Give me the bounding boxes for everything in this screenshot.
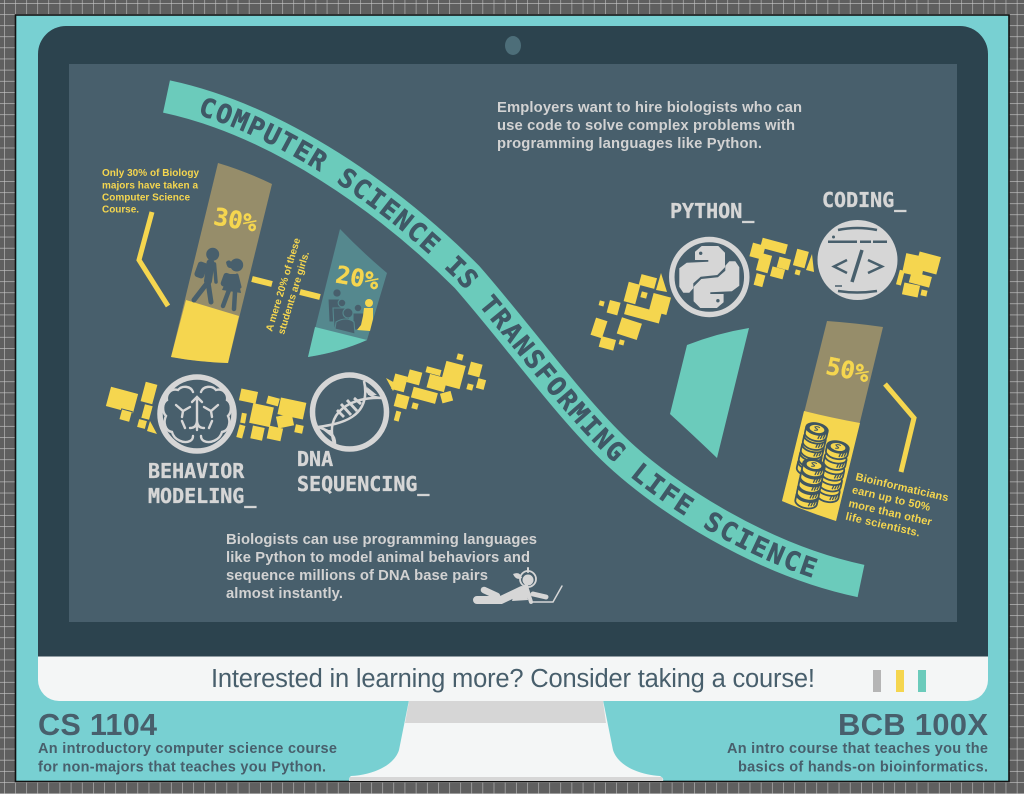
text: biologists: almost instantly. bbox=[226, 586, 343, 602]
course: CS 1104 bbox=[38, 708, 337, 776]
text: biologists bbox=[226, 532, 537, 602]
course: CS 1104: An introductory computer science course bbox=[38, 741, 337, 757]
text: biologists: sequence millions of DNA base pairs bbox=[226, 568, 488, 584]
label 20%: 20% bbox=[334, 261, 382, 296]
callout line right bbox=[885, 384, 914, 472]
label: DNA sequencing bbox=[297, 447, 430, 496]
course: CS 1104: for non-majors that teaches you Python. bbox=[38, 760, 326, 776]
monitor stand bbox=[349, 700, 663, 781]
course: BCB 100X: BCB 100X bbox=[838, 707, 988, 742]
tiles behind brain icon bbox=[106, 382, 306, 441]
tiles right of DNA icon bbox=[386, 353, 486, 422]
callout: 30 percent of biology majors: Only 30% of Biology bbox=[102, 168, 199, 179]
callout line left bbox=[139, 212, 168, 306]
callout: bioinformaticians: Bioinformaticians bbox=[854, 471, 950, 504]
callout: bioinformaticians: life scientists. bbox=[844, 511, 921, 540]
icon: group with girl bbox=[328, 289, 373, 334]
text: biologists: Biologists can use programming languages bbox=[226, 532, 537, 548]
shape: 20 percent bbox=[308, 229, 387, 357]
text: coding label: CODING_ bbox=[822, 188, 907, 212]
footer call to action: Interested in learning more? Consider taking a course! bbox=[211, 665, 815, 693]
icon: students bbox=[194, 248, 243, 309]
callout: bioinformaticians: more than other bbox=[847, 498, 934, 529]
course: BCB 100X: An intro course that teaches you the bbox=[727, 741, 988, 757]
text: biologists: like Python to model animal behaviors and bbox=[226, 550, 530, 566]
icon: coin stacks bbox=[794, 421, 850, 510]
course: CS 1104: CS 1104 bbox=[38, 708, 157, 742]
course: BCB 100X bbox=[727, 707, 988, 776]
callout: 30 percent of biology majors: Course. bbox=[102, 204, 139, 216]
ribbon title: COMPUTER SCIENCE IS TRANSFORMING LIFE SCIENCE bbox=[201, 98, 818, 578]
monitor bezel bbox=[38, 26, 988, 657]
label: DNA sequencing: DNA bbox=[297, 447, 333, 471]
icon: python bbox=[672, 240, 747, 314]
callout: 30 percent of biology majors: Computer Science bbox=[102, 192, 190, 204]
label: behavior modeling bbox=[148, 459, 257, 508]
callout: bioinformaticians: earn up to 50% bbox=[851, 484, 932, 514]
shape: teal panel bbox=[670, 328, 749, 458]
icon: DNA bbox=[312, 375, 386, 449]
monitor chin bbox=[38, 656, 988, 701]
camera bbox=[505, 36, 521, 55]
icon: coding bbox=[818, 220, 898, 300]
callout: 30 percent of biology majors: majors have taken a bbox=[102, 180, 198, 192]
colour bars bbox=[873, 670, 926, 692]
callout: girls: A mere 20% of these bbox=[264, 236, 303, 333]
bar: 50 percent bbox=[782, 321, 883, 521]
label 30%: 30% bbox=[212, 203, 260, 238]
text: employers: Employers want to hire biologists who can bbox=[497, 100, 802, 116]
course: BCB 100X: basics of hands-on bioinformatics. bbox=[738, 760, 988, 776]
label: behavior modeling: MODELING_ bbox=[148, 484, 257, 508]
label 50%: 50% bbox=[824, 352, 872, 388]
tiles right of coding icon bbox=[896, 251, 941, 298]
text: employers bbox=[497, 100, 802, 152]
icon: brain bbox=[160, 377, 234, 451]
tiles left of python icon bbox=[591, 273, 671, 351]
dashes connecting bars bbox=[252, 279, 320, 297]
python snake top bbox=[679, 246, 739, 308]
callout: bioinformaticians bbox=[844, 471, 950, 540]
label: behavior modeling: BEHAVIOR bbox=[148, 459, 245, 483]
callout: girls: students are girls. bbox=[276, 250, 312, 336]
text: python label: PYTHON_ bbox=[670, 199, 755, 223]
callout: 30 percent of biology majors bbox=[102, 168, 199, 216]
label: DNA sequencing: SEQUENCING_ bbox=[297, 472, 430, 496]
tiles between python and coding bbox=[749, 238, 814, 287]
text: employers: programming languages like Python. bbox=[497, 136, 762, 152]
icon: person with laptop bbox=[477, 568, 562, 602]
bar: 30 percent bbox=[171, 163, 272, 363]
text: employers: use code to solve complex problems with bbox=[497, 118, 795, 134]
screen bbox=[69, 64, 957, 622]
